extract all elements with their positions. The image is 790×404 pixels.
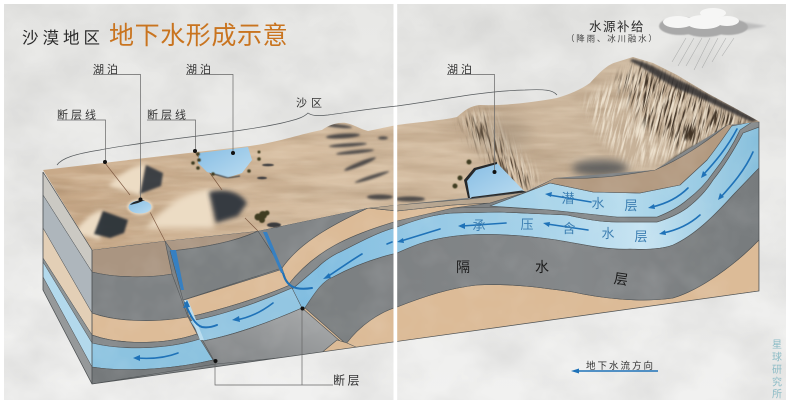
right lake [464,162,527,198]
label: aquitard: 隔 [456,259,470,275]
label: water recharge: （降雨、冰川融水） [566,34,659,44]
block diagram: left side face [43,172,92,384]
label: unconfined aquifer: 层 [624,198,638,213]
label: water recharge: 水源补给 [589,19,645,34]
stone mottling [90,120,760,390]
隔水层 lower aquitard [296,168,759,344]
title [22,22,288,50]
label: lake 2 [186,63,235,155]
watermark: 研 [772,364,782,376]
label: aquitard: 层 [613,270,629,288]
watermark: 星 [772,339,782,351]
legend: groundwater flow direction: 地下水流方向 [586,360,655,372]
label: confined aquifer: 层 [634,229,648,244]
arrowheads and fault water bands [133,171,724,361]
label: lake 3 [447,63,496,174]
label: fault line 2: 断层线 [147,108,189,122]
section underlay [90,120,760,390]
brown top layer [527,124,733,193]
front cross-section of rock layers [90,120,760,390]
label: lake 1 [93,63,142,202]
label: lake 3: 湖泊 [447,63,475,76]
label: fault line 1 [57,108,107,164]
mountain striations [583,66,747,168]
watermark [772,339,782,400]
watermark: 究 [772,376,782,388]
legend: groundwater flow direction [571,360,658,374]
section C top grey wedge [258,208,368,268]
label: fault: 断层 [333,372,362,388]
title: 地下水形成示意 [109,22,288,50]
dune A [108,164,146,196]
small lake [127,199,153,215]
oasis trees [191,150,471,228]
thin clay layer [288,122,760,290]
潜水层 unconfined aquifer [490,122,752,217]
tan wedge with beige band [282,203,490,285]
icon: rain cloud [659,8,767,70]
right dune field shadows [324,123,425,202]
watermark: 球 [772,350,782,364]
section B layers [165,231,258,251]
label: lake 2: 湖泊 [186,63,214,76]
label: sand zone: 沙区 [296,96,326,110]
dune B [74,210,103,240]
label: fault line 2 [147,108,197,153]
label: unconfined aquifer [561,191,638,213]
bottom sand layer [300,240,759,354]
section A layers [92,241,172,277]
label: water recharge [566,19,659,44]
label: fault line 1: 断层线 [57,108,99,122]
label: unconfined aquifer: 潜 [561,191,575,206]
label: confined aquifer [472,217,648,244]
fault sliver [184,300,204,340]
label: fault [214,306,362,388]
title: 沙漠地区 [22,28,104,48]
label: confined aquifer: 承 [472,218,486,233]
sand terrain surface [43,57,760,250]
label: confined aquifer: 压 [520,217,534,232]
label: aquitard: 水 [535,259,549,275]
sand zone brace [57,90,557,165]
label: confined aquifer: 含 [562,221,576,236]
label: unconfined aquifer: 水 [591,196,605,211]
middle lake [198,147,252,178]
dune C [146,189,214,228]
fault lines on terrain [105,152,258,241]
base outline of block [43,122,759,384]
groundwater flow arrows [137,129,753,358]
ridge dark line [630,59,758,122]
label: lake 1: 湖泊 [93,63,121,76]
label: aquitard [456,259,629,288]
label: confined aquifer: 水 [601,226,615,241]
承压含水层 confined aquifer [291,127,759,312]
mountain shadows [663,138,705,165]
watermark: 所 [772,388,782,400]
centre paper seam [394,0,397,404]
